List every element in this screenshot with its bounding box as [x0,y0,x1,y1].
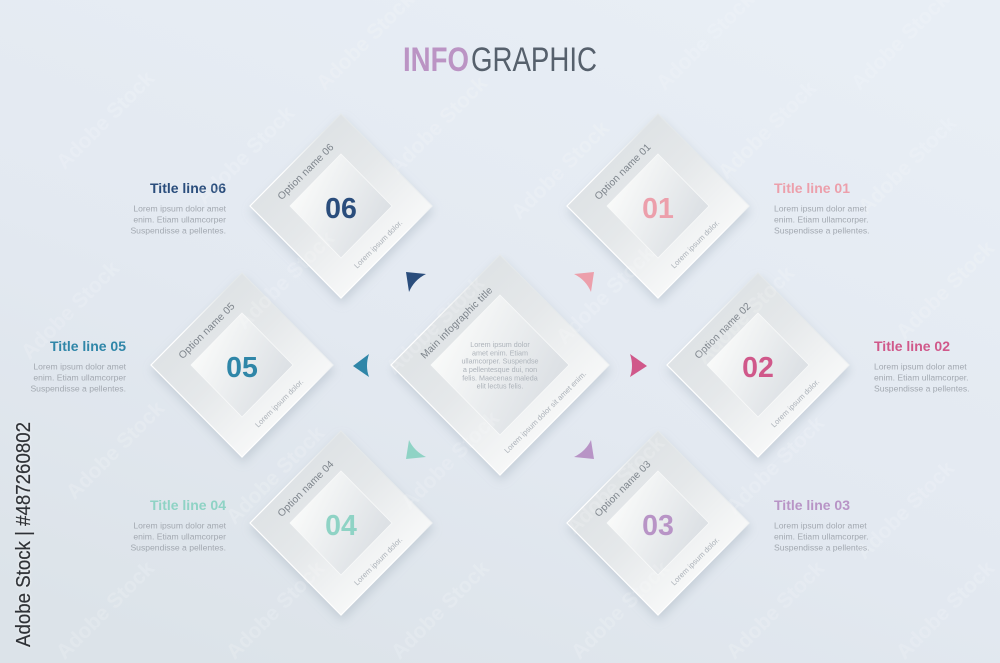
arrow: to 02 [630,354,647,377]
watermark pattern: Adobe Stock [892,237,999,344]
panel: option 02 [667,273,849,457]
panel: option 06: Option name 06 [276,142,337,202]
panel: main diamond: Lorem ipsum dolor [470,340,530,349]
watermark pattern: Adobe Stock [222,557,329,663]
panel: main diamond: ullamcorper. Suspendse [461,357,539,366]
watermark pattern: Adobe Stock [722,557,829,663]
title [403,41,597,79]
text block: title line 04: Title line 04 [150,497,226,513]
stock id label: Adobe Stock | #487260802 [13,422,35,647]
panel: option 03: 03 [642,510,674,542]
watermark pattern: Adobe Stock [385,72,492,179]
panel: option 03: Lorem ipsum dolor. [669,535,721,587]
text block: title line 05: enim. Etiam ullamcorper [33,372,126,382]
watermark pattern: Adobe Stock [62,397,169,504]
panel: option 03: Option name 03 [593,459,654,519]
text block: title line 05 [30,338,127,394]
text block: title line 04 [130,497,227,552]
watermark pattern: Adobe Stock [567,557,674,663]
panel: main diamond: felis. Maecenas maleda [462,373,538,382]
text block: title line 01: Suspendisse a pellentes. [774,226,870,236]
arrow: to 04 [406,440,426,459]
text block: title line 04: enim. Etiam ullamcorper [133,532,226,542]
text block: title line 03: Suspendisse a pellentes. [774,542,870,552]
panel: option 02: 02 [742,352,774,384]
text block: title line 04: Lorem ipsum dolor amet [133,520,227,530]
panel: option 04: Lorem ipsum dolor. [352,535,404,587]
watermark pattern: Adobe Stock [562,432,669,539]
text block: title line 04: Suspendisse a pellentes. [130,542,226,552]
watermark pattern: Adobe Stock [854,112,961,219]
panel: option 01: Option name 01 [593,142,654,202]
watermark pattern: Adobe Stock [52,557,159,663]
panel: option 06 [250,114,432,298]
panel: option 05: Option name 05 [177,301,238,361]
watermark pattern: Adobe Stock [382,272,489,379]
panel: main diamond [391,255,609,475]
watermark pattern: Adobe Stock [892,557,999,663]
text block: title line 05: Lorem ipsum dolor amet [33,362,127,372]
panel: option 06: Lorem ipsum dolor. [352,218,404,270]
panel: main diamond: Lorem ipsum dolor sit amet enim. [502,369,588,455]
watermark pattern: Adobe Stock [17,257,124,364]
text block: title line 01 [774,180,870,236]
panel: option 04: Option name 04 [276,459,337,519]
watermark pattern: Adobe Stock [692,262,799,369]
text block: title line 02: enim. Etiam ullamcorper. [874,372,969,382]
panel: option 06: 06 [325,193,357,225]
text block: title line 03 [774,497,870,552]
panel: main diamond: amet enim. Etiam [472,348,528,357]
arrow: to 01 [574,272,594,292]
watermark pattern: Adobe Stock [852,457,959,564]
watermark pattern: Adobe Stock [722,412,829,519]
panel: option 05: 05 [226,352,258,384]
title: INFO [403,41,469,79]
panel: option 02: Lorem ipsum dolor. [769,377,821,429]
text block: title line 06: Lorem ipsum dolor amet [133,204,227,214]
text block: title line 01: Title line 01 [774,180,850,196]
watermark pattern: Adobe Stock [232,227,339,334]
text block: title line 02: Lorem ipsum dolor amet [874,362,967,372]
watermark pattern: Adobe Stock [52,67,159,174]
text block: title line 02: Suspendisse a pellentes. [874,384,970,394]
text block: title line 01: Lorem ipsum dolor amet [774,204,867,214]
watermark pattern: Adobe Stock [192,102,299,209]
text block: title line 03: Lorem ipsum dolor amet [774,520,867,530]
panel: main diamond: elit lectus felis. [477,382,523,391]
text block: title line 06: Suspendisse a pellentes. [130,226,226,236]
panel: option 02: Option name 02 [693,301,754,361]
panel: option 05: Lorem ipsum dolor. [253,377,305,429]
watermark pattern: Adobe Stock [507,117,614,224]
watermark pattern: Adobe Stock [552,242,659,349]
arrow: to 06 [406,272,426,292]
title: GRAPHIC [471,41,597,79]
watermark pattern: Adobe Stock [397,407,504,514]
panel: main diamond: a pellentesque dui, non [463,365,537,374]
text block: title line 06: Title line 06 [150,180,226,196]
text block: title line 03: Title line 03 [774,497,850,513]
arrow: to 05 [353,354,369,377]
watermark pattern: Adobe Stock [714,77,821,184]
panel: option 03 [567,431,749,615]
text block: title line 05: Title line 05 [50,338,126,354]
watermark pattern: Adobe Stock [387,557,494,663]
panel: option 01: 01 [642,193,674,225]
watermark pattern: Adobe Stock [222,422,329,529]
panel: main diamond: Main infographic title [419,285,495,361]
panel: option 04 [250,431,432,615]
text block: title line 06 [130,180,227,236]
text block: title line 02: Title line 02 [874,338,950,354]
panel: option 04: 04 [325,510,357,542]
text block: title line 05: Suspendisse a pellentes. [30,384,126,394]
text block: title line 02 [874,338,970,394]
text block: title line 01: enim. Etiam ullamcorper. [774,214,869,224]
text block: title line 06: enim. Etiam ullamcorper [133,214,226,224]
panel: option 01: Lorem ipsum dolor. [669,218,721,270]
panel: option 01 [567,114,749,298]
panel: option 05 [151,273,333,457]
arrow: to 03 [574,440,594,459]
text block: title line 03: enim. Etiam ullamcorper. [774,532,869,542]
